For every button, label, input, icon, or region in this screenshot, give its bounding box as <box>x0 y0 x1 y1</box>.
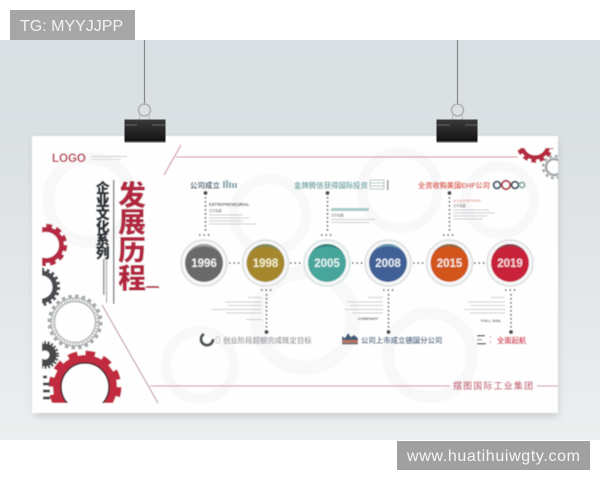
board panel <box>24 127 565 420</box>
watermark tag: top-left <box>10 10 135 40</box>
top rule with slash <box>164 145 518 175</box>
year node: 1998: 1998 <box>253 258 279 270</box>
vertical subtitle: 系 <box>96 232 110 248</box>
vertical small text <box>103 259 107 303</box>
vertical subtitle: 化 <box>96 219 110 235</box>
hanging strings <box>144 40 458 105</box>
icon: donut <box>201 334 220 345</box>
bottom milestone: 2019 <box>464 290 527 345</box>
top milestone: 1996: ENTREPRENEURIAL <box>209 202 250 207</box>
gear: bottom-left dark <box>43 377 50 398</box>
bottom milestone: 2008: 公司上市成立德国分公司 <box>361 336 442 345</box>
faint background gears <box>48 152 534 399</box>
year node: 2019: 2019 <box>497 258 523 270</box>
top milestone: 1996 <box>190 180 257 235</box>
year node: 2015 <box>426 240 472 286</box>
gear: small red <box>41 223 68 267</box>
corner gears <box>517 147 558 180</box>
watermark tag: top-left: TG: MYYJJPP <box>20 18 123 35</box>
year node: 2008 <box>365 240 411 286</box>
year node: 2005: 2005 <box>314 258 340 270</box>
top milestone: 1996: 公司成立 <box>190 180 220 190</box>
year node: 2019 <box>487 240 533 286</box>
footer company name: 摆图国际工业集团 <box>453 380 533 391</box>
icon: bars <box>223 180 237 188</box>
year node: 1996: 1996 <box>191 258 217 270</box>
bottom milestone: 2019: 全面起航 <box>497 336 527 345</box>
bottom rule <box>150 385 558 387</box>
watermark tag: bottom-right <box>397 441 590 470</box>
bottom milestone: 1998 <box>201 290 312 345</box>
gear cluster <box>41 223 122 404</box>
top milestone: 1996: 文字标题 <box>209 208 223 213</box>
vertical subtitle: 企 <box>96 180 110 196</box>
title: development history: 展 <box>118 207 146 238</box>
icon: table <box>370 180 384 189</box>
title: development history: 程 <box>118 263 146 294</box>
year node: 1998 <box>242 240 288 286</box>
icon: skyline <box>342 333 358 344</box>
title: development history <box>118 179 160 294</box>
logo <box>52 153 127 165</box>
year node: 2005 <box>304 240 350 286</box>
top milestone: 2005: 金牌腾信获得国际投资 <box>294 181 369 190</box>
title: development history: 发 <box>118 179 146 211</box>
watermark tag: bottom-right: www.huatihuiwgty.com <box>406 448 580 465</box>
bottom milestone: 2019: FULL SAIL <box>481 318 502 323</box>
year node: 2008: 2008 <box>375 258 401 270</box>
gear: corner red <box>517 147 554 164</box>
binder clip: right <box>436 104 478 142</box>
top milestone: 2005: 文字标题 <box>331 212 345 218</box>
vertical subtitle: 业 <box>96 194 110 209</box>
top milestone: 2015: ACQUISITIONS <box>453 198 481 203</box>
timeline connectors <box>229 262 487 264</box>
vertical subtitle: 文 <box>96 206 110 222</box>
board shadow <box>34 140 558 416</box>
icon: linked rings <box>494 181 525 189</box>
top milestone: 2015: 文字标题 <box>453 203 467 208</box>
vertical divider <box>113 180 114 304</box>
gear: dark <box>41 267 61 307</box>
logo: LOGO <box>52 153 86 165</box>
gear: large red <box>52 354 118 420</box>
vertical subtitle: 列 <box>96 245 110 261</box>
icon: lines <box>477 335 491 344</box>
bottom milestone: 2008: COMPANY <box>358 316 378 321</box>
top milestone: 2015 <box>418 181 525 235</box>
gear: corner gray <box>543 156 565 178</box>
year node: 2015: 2015 <box>437 258 463 270</box>
title: development history: 历 <box>118 235 146 266</box>
top milestone: 2005 <box>294 180 388 235</box>
bottom milestone: 2008 <box>342 290 442 345</box>
diagonal line <box>102 305 158 403</box>
gear: small dark <box>41 340 60 370</box>
year node: 1996 <box>181 240 227 286</box>
gear: gray ring <box>49 296 101 348</box>
top milestone: 2015: 全资收购美国EHF公司 <box>418 181 490 190</box>
bottom milestone: 1998: 创业阶段超额完成既定目标 <box>223 336 312 345</box>
binder clip: left <box>124 104 166 142</box>
vertical subtitle <box>96 180 110 261</box>
